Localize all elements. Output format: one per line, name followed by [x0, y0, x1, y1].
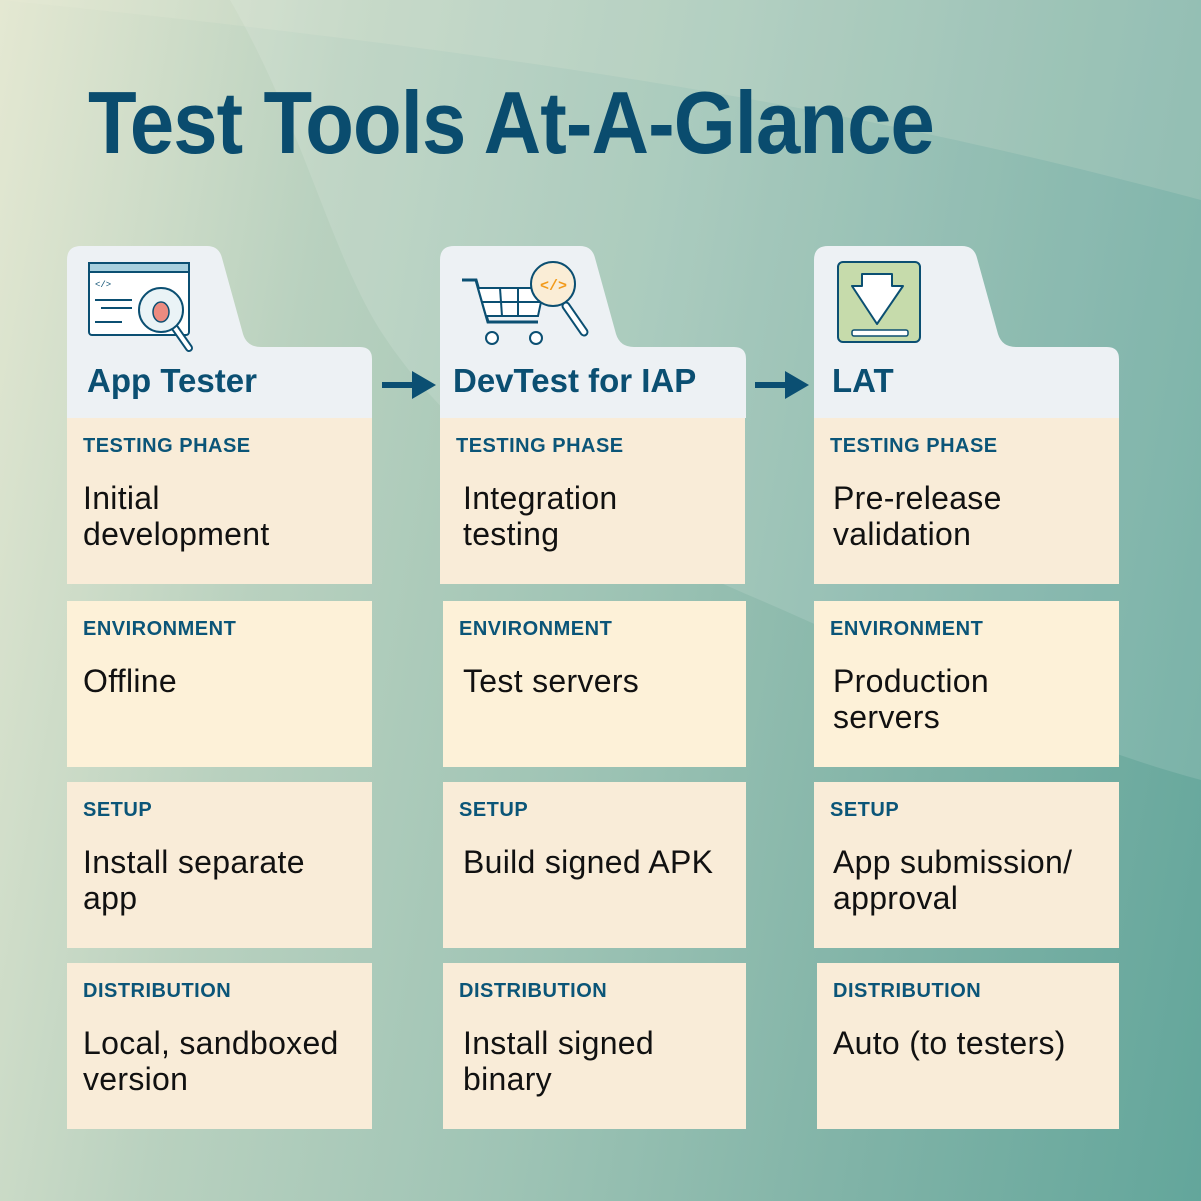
- cell: environment: [814, 601, 1119, 767]
- cell: setup: [443, 782, 746, 948]
- cell: distribution: Auto (to testers): [833, 1025, 1066, 1061]
- icon: download box: [837, 261, 921, 343]
- icon: code window with bug magnifier: </>: [95, 280, 111, 290]
- column: DevTest for IAP: [440, 246, 746, 1129]
- cell: testing phase: TESTING PHASE: [83, 435, 251, 457]
- cell: environment: Offline: [83, 663, 177, 699]
- cell: distribution: binary: [463, 1061, 552, 1097]
- cell: setup: [814, 782, 1119, 948]
- icon: cart with code magnifier: [462, 261, 588, 345]
- cell: testing phase: Integration: [463, 480, 618, 516]
- header name: App Tester: [87, 362, 257, 399]
- arrow 2: [755, 371, 809, 399]
- cell: testing phase: validation: [833, 516, 971, 552]
- cell: environment: ENVIRONMENT: [830, 618, 983, 640]
- cell: testing phase: [440, 418, 745, 584]
- header name: LAT: [832, 362, 894, 399]
- column: LAT: [814, 246, 1119, 1129]
- cell: environment: ENVIRONMENT: [83, 618, 236, 640]
- cell: setup: App submission/: [833, 844, 1072, 880]
- cell: testing phase: [814, 418, 1119, 584]
- cell: testing phase: Initial: [83, 480, 160, 516]
- header tab: [67, 246, 372, 418]
- cell: distribution: DISTRIBUTION: [83, 980, 231, 1002]
- cell: testing phase: Pre-release: [833, 480, 1002, 516]
- header name: DevTest for IAP: [453, 362, 696, 399]
- cell: distribution: DISTRIBUTION: [459, 980, 607, 1002]
- cell: environment: Test servers: [463, 663, 639, 699]
- cell: distribution: [67, 963, 372, 1129]
- cell: distribution: [817, 963, 1119, 1129]
- cell: setup: Install separate: [83, 844, 305, 880]
- column: App Tester: [67, 246, 372, 1129]
- icon: code window with bug magnifier: [88, 262, 193, 352]
- cell: setup: SETUP: [83, 799, 152, 821]
- cell: setup: app: [83, 880, 137, 916]
- cell: distribution: Local, sandboxed: [83, 1025, 339, 1061]
- cell: setup: Build signed APK: [463, 844, 713, 880]
- header tab: [440, 246, 746, 418]
- cell: setup: SETUP: [459, 799, 528, 821]
- cell: testing phase: TESTING PHASE: [456, 435, 624, 457]
- arrow 1: [382, 371, 436, 399]
- cell: distribution: DISTRIBUTION: [833, 980, 981, 1002]
- cell: distribution: version: [83, 1061, 188, 1097]
- cell: testing phase: [67, 418, 372, 584]
- icon: cart with code magnifier: </>: [540, 278, 567, 295]
- cell: distribution: [443, 963, 746, 1129]
- cell: testing phase: development: [83, 516, 270, 552]
- cell: environment: [67, 601, 372, 767]
- cell: environment: [443, 601, 746, 767]
- title: Test Tools At-A-Glance: [88, 73, 934, 172]
- cell: testing phase: TESTING PHASE: [830, 435, 998, 457]
- header tab: [814, 246, 1119, 418]
- cell: environment: servers: [833, 699, 940, 735]
- cell: distribution: Install signed: [463, 1025, 654, 1061]
- cell: environment: ENVIRONMENT: [459, 618, 612, 640]
- cell: testing phase: testing: [463, 516, 559, 552]
- cell: setup: [67, 782, 372, 948]
- cell: environment: Production: [833, 663, 989, 699]
- cell: setup: SETUP: [830, 799, 899, 821]
- cell: setup: approval: [833, 880, 958, 916]
